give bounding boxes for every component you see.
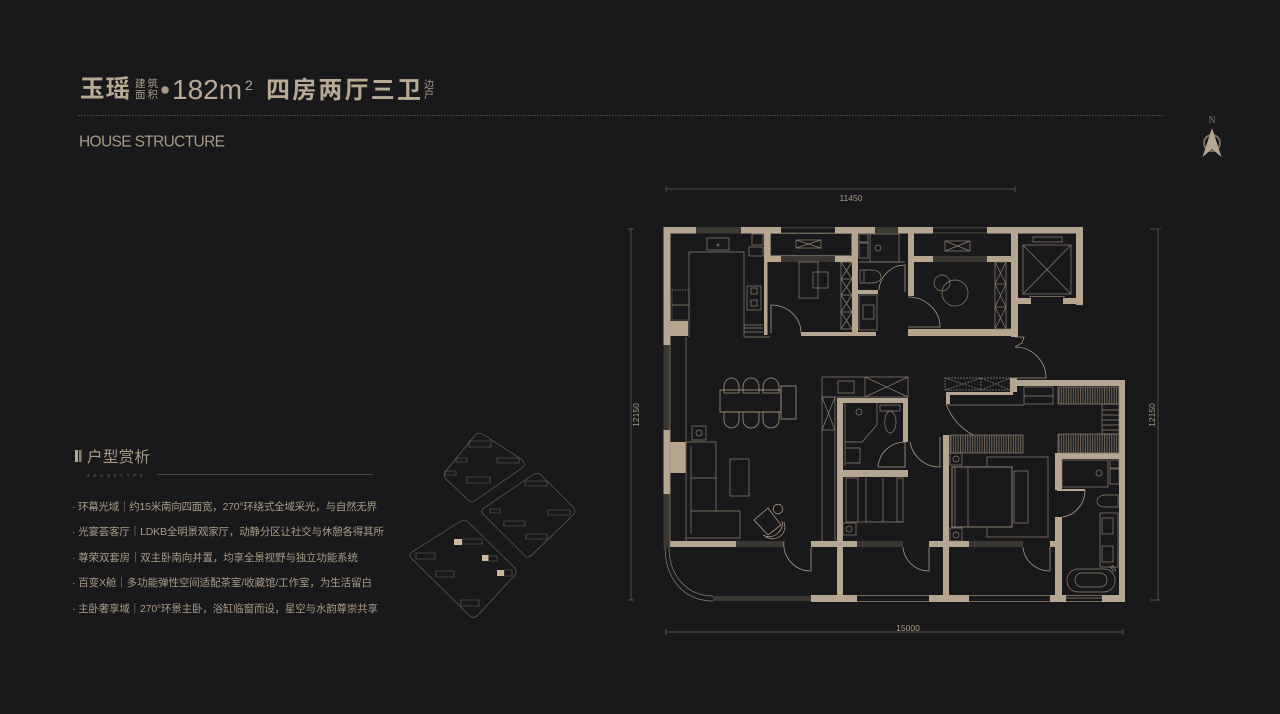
panel: house type analysis [72,448,384,615]
title: corner unit tag [424,79,434,101]
dimension left [628,229,641,600]
dimension bottom [666,623,1123,635]
title: area label [135,77,169,101]
title: corner unit tag: 边 [424,79,434,91]
kitchen [672,234,770,337]
feature 5: · 主卧奢享域｜270°环景主卧，浴缸临窗而设，星空与水韵尊崇共享 [72,602,378,615]
bedroom north east [934,241,1011,329]
dimensions [628,186,1161,635]
feature list [72,500,384,615]
title: corner unit tag: 户 [424,88,434,101]
dimension top [666,186,1015,203]
title: area value: 182m [172,74,242,105]
key map: block C [410,520,516,617]
wardrobes [950,387,1119,453]
doors [771,265,1085,571]
subtitle: HOUSE STRUCTURE [79,134,225,150]
feature 4: · 百变X舱｜多功能弹性空间适配茶室/收藏馆/工作室，为生活留白 [72,576,372,589]
dimension right [1147,229,1161,600]
title: layout: 四房两厅三卫 [266,77,421,104]
key map: block A [444,433,524,502]
lift [1023,237,1071,296]
dimension top: 11450 [839,193,863,203]
title: area label: 建筑 [135,77,158,90]
title: project name: 玉瑶 [80,75,130,103]
bedroom south west [843,478,903,535]
key map: building positions [410,433,575,617]
section heading: 户型赏析 [87,448,150,466]
floor plan [664,227,1125,602]
dimension left: 12150 [631,403,641,427]
section english label: HOUSETYPE [86,473,143,478]
north bathroom [859,234,905,330]
title block [80,74,434,105]
windows [664,227,1023,601]
feature 1: · 环幕光域｜约15米南向四面宽，270°环绕式全域采光，与自然无界 [72,500,378,513]
bedroom north west [770,234,852,329]
key map: block B [482,473,575,557]
master bed [950,453,1048,541]
north arrow [1202,116,1222,157]
storage north of master [945,378,1053,405]
walls [664,227,1125,602]
key map: highlighted unit [454,539,504,576]
dimension right: 12150 [1147,403,1157,427]
storage and central bathroom [822,377,908,541]
section icon [75,450,82,462]
lounge chair [754,504,785,539]
master bathroom [1062,460,1119,598]
title: area label: 面积 [135,89,158,101]
north arrow: N [1209,116,1216,126]
dining [720,378,796,428]
dimension bottom: 15000 [896,623,920,633]
feature 3: · 尊荣双套房｜双主卧南向并置，均享全景视野与独立功能系统 [72,551,358,564]
living room [686,426,749,541]
title: area superscript: 2 [245,77,253,93]
balcony [665,337,1102,602]
feature 2: · 光宴荟客厅｜LDKB全明景观家厅，动静分区让社交与休憩各得其所 [72,525,384,538]
